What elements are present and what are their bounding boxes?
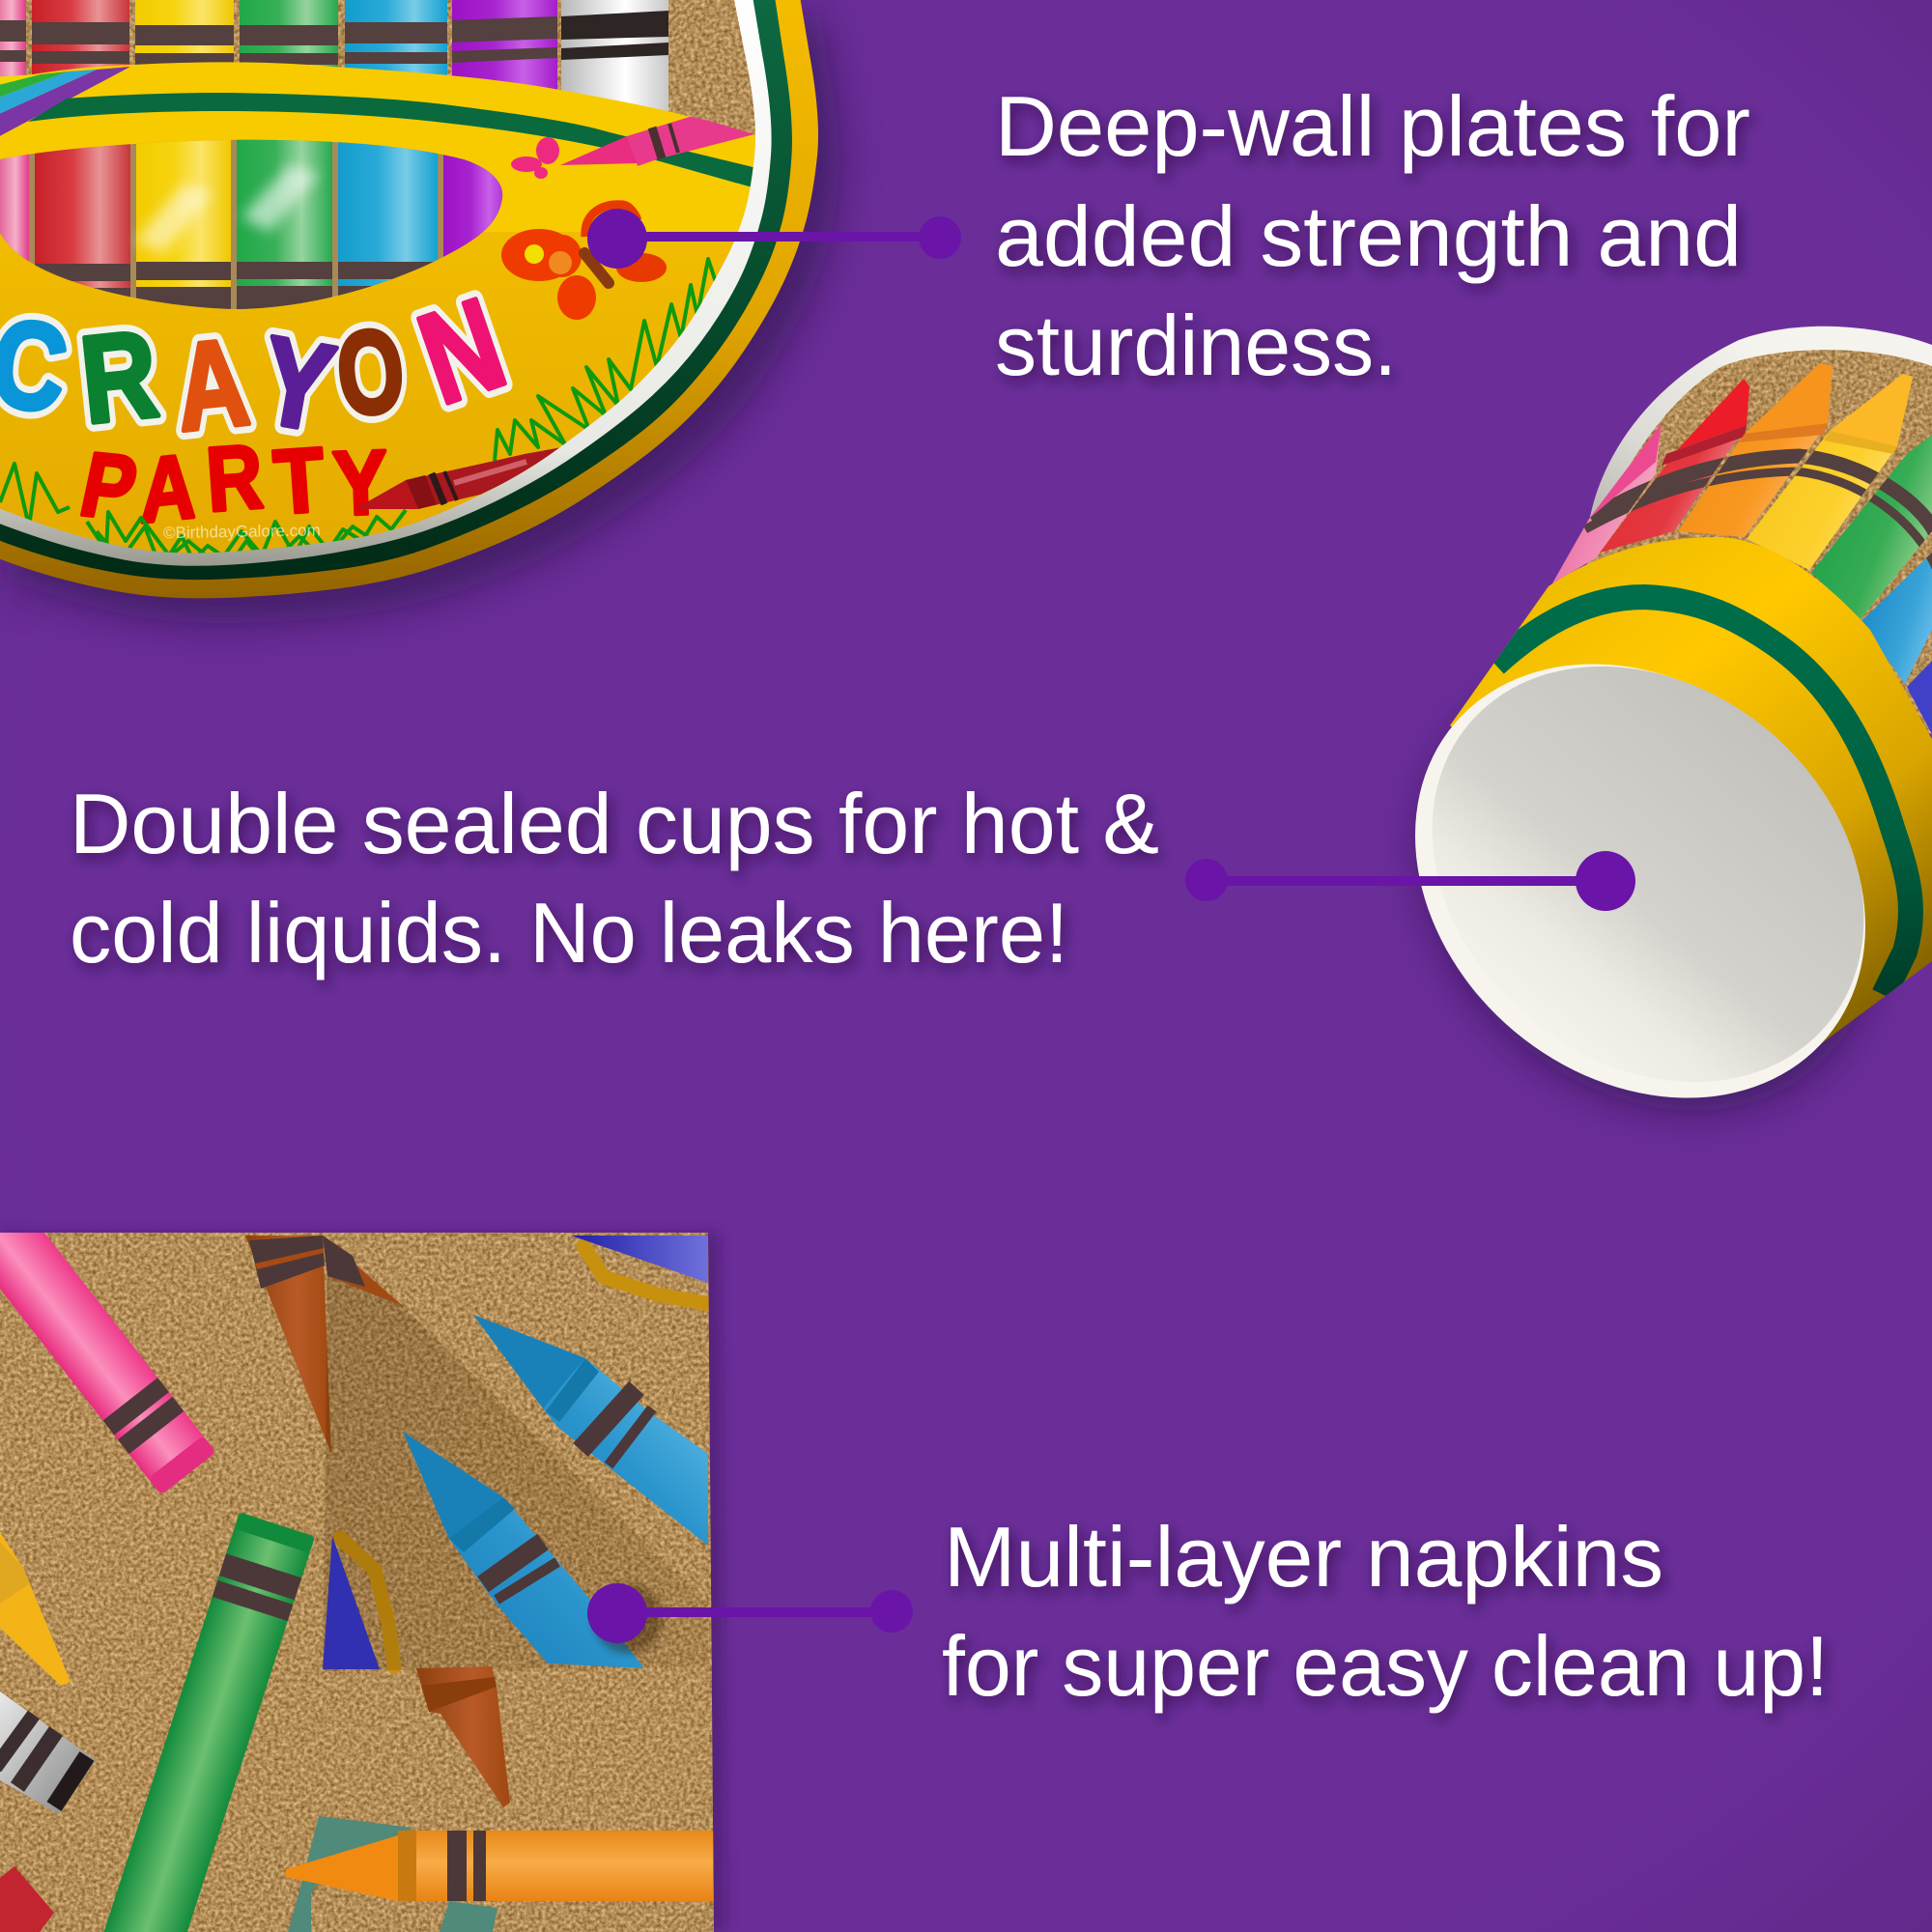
PARTY lettering	[80, 444, 386, 525]
cup green stripe	[1495, 597, 1911, 995]
callout: cups	[1185, 851, 1635, 911]
text: napkins	[942, 1509, 1829, 1714]
text: plates	[995, 78, 1750, 393]
top crayon row	[0, 0, 668, 121]
PARTY lettering: T	[270, 428, 327, 533]
paper cup	[1327, 327, 1932, 1200]
cup base inner	[1349, 581, 1932, 1168]
CRAYON lettering outline: A	[169, 312, 255, 457]
PARTY lettering: P	[72, 434, 145, 539]
cup crayon bands	[1585, 456, 1932, 570]
plate face	[0, 0, 755, 553]
CRAYON lettering: A	[169, 312, 255, 457]
cup base	[1327, 575, 1932, 1187]
CRAYON lettering outline: Y	[251, 311, 343, 459]
PARTY lettering: R	[203, 426, 266, 530]
crayon window	[0, 139, 502, 309]
green band stripe	[28, 93, 773, 193]
red crayon	[355, 446, 567, 509]
cup crayons	[1552, 363, 1932, 734]
plate green ring	[0, 0, 792, 580]
text: cups: cold liquids. No leaks here!	[70, 885, 1068, 980]
plate white ring	[0, 0, 772, 566]
cup kraft interior	[1565, 350, 1932, 734]
text: cups	[70, 776, 1159, 980]
brown napkin crayon lower	[416, 1666, 510, 1807]
cup yellow body	[1450, 537, 1932, 1049]
indigo napkin crayon pieces	[323, 1236, 708, 1669]
pink butterfly	[511, 137, 559, 179]
green napkin crayon	[85, 1512, 315, 1932]
kraft background behind top crayons	[0, 0, 773, 135]
text: napkins: for super easy clean up!	[942, 1618, 1829, 1714]
orange napkin crayon	[286, 1831, 717, 1901]
blue napkin crayon upper	[473, 1315, 708, 1546]
paper plate	[0, 0, 840, 623]
grass	[0, 259, 717, 565]
CRAYON lettering: Y	[251, 311, 343, 459]
CRAYON lettering: O	[331, 303, 411, 441]
white napkin crayon	[0, 1691, 96, 1814]
blue napkin crayon lower	[403, 1432, 644, 1668]
PARTY lettering: Y	[331, 431, 389, 534]
text: napkins: Multi-layer napkins	[944, 1509, 1663, 1605]
crayon cones and collars	[1589, 363, 1913, 519]
cup rim	[1589, 327, 1932, 580]
text: plates: added strength and	[995, 188, 1742, 284]
rainbow corner	[0, 67, 130, 141]
fold shading	[323, 1276, 708, 1671]
brown napkin crayon top	[245, 1236, 403, 1454]
CRAYON lettering outline	[0, 290, 513, 440]
napkin scribbles	[340, 1246, 710, 1666]
CRAYON lettering: R	[74, 305, 164, 450]
text: plates: Deep-wall plates for	[995, 78, 1750, 174]
text: plates: sturdiness.	[995, 298, 1397, 393]
CRAYON lettering	[0, 297, 507, 433]
plate rim	[0, 0, 818, 598]
yellow napkin crayon	[0, 1532, 71, 1686]
CRAYON lettering outline: R	[74, 305, 164, 450]
plate edge kraft patch	[672, 0, 755, 131]
PARTY lettering: A	[140, 435, 196, 543]
callout: plates	[587, 209, 961, 269]
teal scribble	[288, 1816, 497, 1932]
red napkin crayon	[0, 1866, 54, 1932]
napkin	[0, 1200, 726, 1932]
text: cups: Double sealed cups for hot &	[70, 776, 1159, 871]
watermark: ©BirthdayGalore.com	[163, 521, 321, 542]
CRAYON lettering: N	[403, 270, 521, 432]
pink napkin crayon	[0, 1200, 216, 1495]
yellow band	[0, 62, 773, 232]
CRAYON lettering outline: O	[331, 303, 411, 441]
callout: napkins	[587, 1583, 913, 1654]
pink crayon	[560, 116, 754, 166]
CRAYON lettering outline: N	[403, 270, 521, 432]
orange butterfly	[501, 205, 667, 320]
